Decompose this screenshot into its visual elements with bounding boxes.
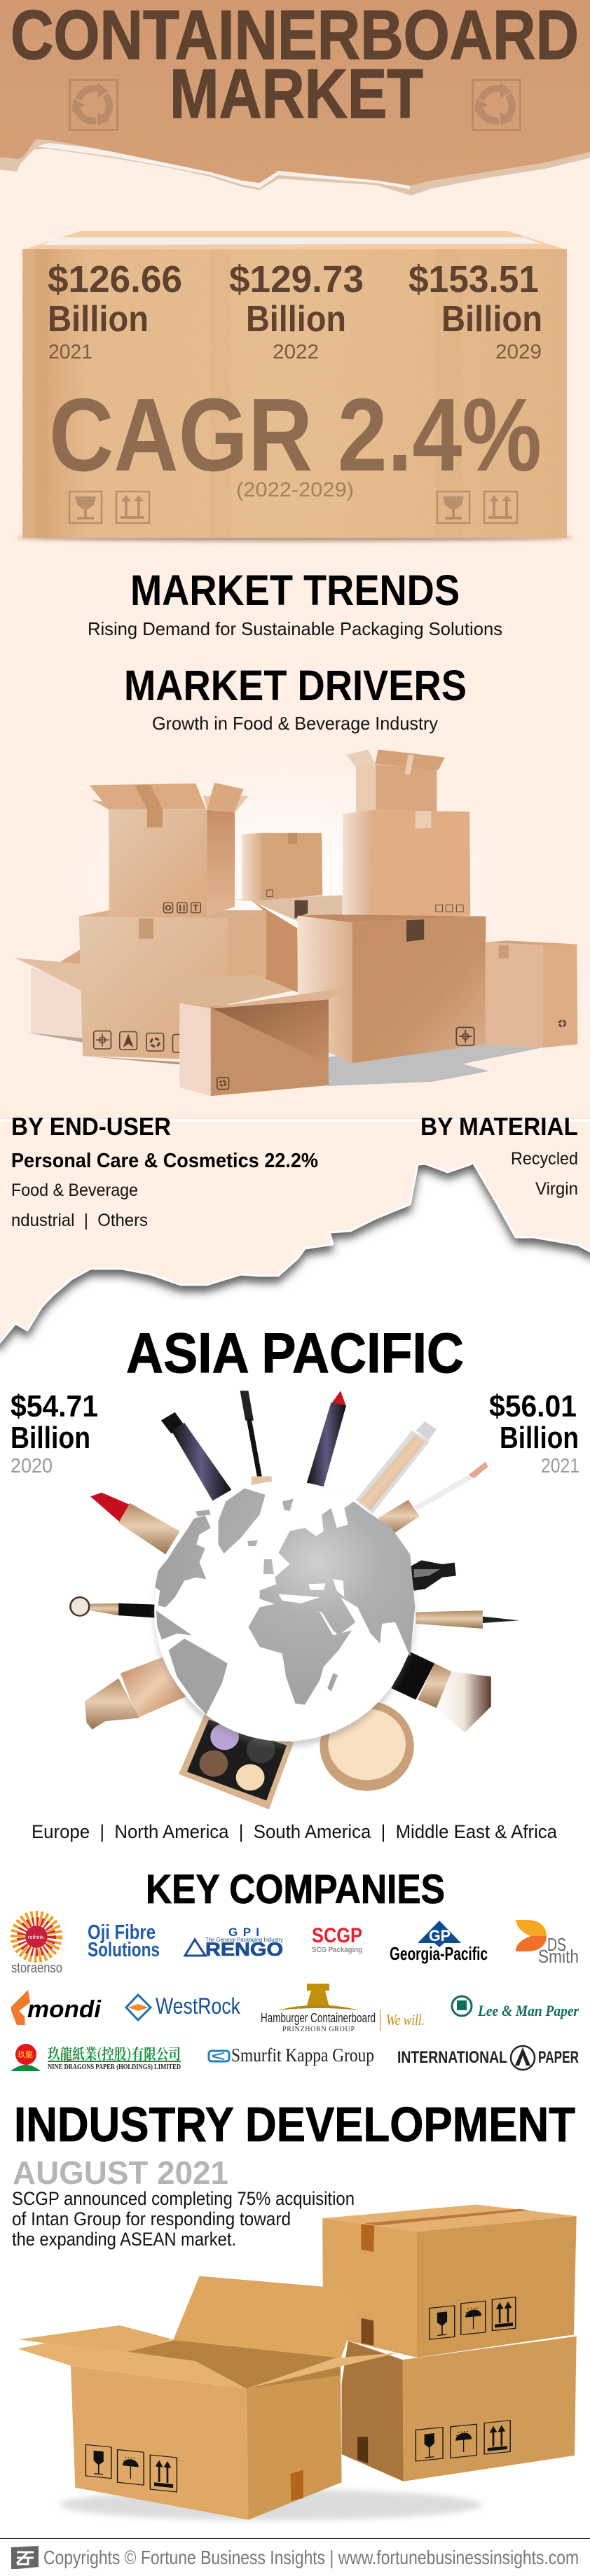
icon: eyeshadow palette [179, 1713, 294, 1809]
box: front open [155, 975, 350, 1096]
box: far left open [14, 949, 83, 1038]
panel: by material [420, 1113, 578, 1199]
logo: Stora Enso: rethink. [28, 1934, 45, 1940]
stat: 2022: 2022 [273, 341, 319, 363]
icon: eyeliner bottle [409, 1560, 456, 1591]
stat: 2029: 2029 [495, 341, 542, 363]
logo: Hamburger Containerboard: We will. [386, 2011, 425, 2028]
logo: GPI Rengo: RENGO [205, 1939, 283, 1960]
Africa [248, 1603, 352, 1705]
logo: Oji Fibre Solutions: Solutions [88, 1939, 160, 1961]
stat: 2021: Billion [48, 299, 149, 340]
icon: foundation bottle [85, 1657, 186, 1729]
logo: Hamburger Containerboard: Hamburger Containerboard [261, 2011, 376, 2025]
box: stacked upper [322, 2205, 577, 2358]
logo: DS Smith: DS [547, 1934, 566, 1955]
illustration: kraft cardboard boxes [18, 2205, 577, 2521]
panel: by end-user [11, 1113, 318, 1230]
logo: Mondi [11, 1990, 102, 2025]
heading: market drivers: MARKET DRIVERS [124, 662, 467, 709]
logo: Nine Dragons Paper: NINE DRAGONS PAPER (HOLDINGS) LIMITED [48, 2063, 181, 2071]
logo: SCGP [312, 1924, 362, 1954]
logo: DS Smith [516, 1920, 579, 1967]
icon: lipstick [90, 1493, 180, 1554]
icon: recycling mark left [66, 80, 120, 130]
footer [0, 2538, 590, 2569]
text: market driver: Growth in Food & Beverage Industry [152, 713, 438, 734]
CAGR period: (2022-2029) [236, 479, 354, 501]
text: development description: of Intan Group for responding toward [12, 2208, 291, 2229]
text: development description: the expanding ASEAN market. [12, 2229, 236, 2250]
logo: WestRock [126, 1993, 241, 2020]
logo: Georgia-Pacific: Georgia-Pacific [390, 1943, 488, 1964]
panel: market size cardboard box [16, 231, 574, 541]
title: MARKET [170, 55, 423, 132]
Greenland [218, 1488, 266, 1554]
icon: lip gloss wand [378, 1462, 488, 1535]
segment: industrial and others: ndustrial | Others [11, 1211, 148, 1230]
heading: by material: BY MATERIAL [420, 1113, 578, 1141]
stat: 2021: 2021 [48, 341, 92, 363]
Eurasia [260, 1501, 415, 1657]
logo: Hamburger Containerboard: PRINZHORN GROUP [282, 2026, 355, 2033]
icon: mascara tube [161, 1412, 231, 1501]
logo: DS Smith: Smith [538, 1946, 579, 1967]
stat: 2020: 2020 [11, 1455, 53, 1477]
stat: 2020: $54.71 [11, 1389, 98, 1423]
logo: GPI Rengo: G P I [228, 1926, 259, 1939]
stat: 2022 [229, 258, 364, 363]
logo: Nine Dragons Paper: 玖龍紙業(控股)有限公司 [48, 2043, 181, 2064]
heading: asia pacific: ASIA PACIFIC [126, 1322, 464, 1385]
box: upper left open [90, 783, 248, 917]
logo: Fortune Business Insights mark [11, 2546, 39, 2569]
stat: 2021 [48, 258, 182, 363]
box: small right [486, 940, 577, 1047]
heading: key companies: KEY COMPANIES [146, 1867, 445, 1912]
logo: Lee & Man Paper [452, 1996, 579, 2019]
stat: 2020 [11, 1389, 98, 1477]
stat: 2022: Billion [246, 299, 346, 340]
stat: 2022: $129.73 [229, 258, 364, 300]
stat: 2021: $126.66 [48, 258, 182, 300]
illustration: stacked cardboard boxes [14, 746, 577, 1096]
heading: market trends: MARKET TRENDS [130, 566, 460, 614]
text: market trend: Rising Demand for Sustainable Packaging Solutions [88, 618, 502, 639]
globe [154, 1481, 416, 1741]
stat: 2029: Billion [441, 299, 542, 340]
logo: Nine Dragons Paper: 玖龍 [18, 2049, 33, 2059]
illustration: globe surrounded by cosmetics [70, 1391, 519, 1809]
icon: lip gloss tube [355, 1421, 437, 1514]
North America [155, 1515, 211, 1607]
logo: Hamburger Containerboard [261, 1984, 425, 2033]
logo: Stora Enso: storaenso [11, 1961, 62, 1976]
icon: small brush [70, 1597, 156, 1617]
text: development description [12, 2188, 355, 2250]
logo: Oji Fibre Solutions: Oji Fibre [88, 1921, 156, 1944]
stat: 2021: 2021 [541, 1455, 579, 1477]
Great Britain [263, 1559, 274, 1574]
stat: 2029: $153.51 [409, 258, 539, 300]
stat: 2021 [489, 1389, 579, 1477]
title [11, 0, 579, 132]
logo: Mondi: mondi [27, 1996, 102, 2023]
logo: Nine Dragons Paper [11, 2043, 181, 2071]
top cardboard banner [0, 0, 590, 195]
logo: GPI Rengo: The General Packaging Industry [205, 1937, 283, 1943]
leading segment: Personal Care & Cosmetics 22.2% [11, 1150, 318, 1172]
logo: SCGP: SCGP [312, 1924, 362, 1947]
box: small centre [242, 833, 322, 900]
box: upper right open [346, 749, 445, 813]
icon: recycling mark right [469, 80, 523, 130]
icon: liquid liner [416, 1610, 519, 1629]
logo: Georgia-Pacific: GP [429, 1927, 451, 1944]
logo: Oji Fibre Solutions [88, 1921, 160, 1961]
icon: large brush [391, 1652, 491, 1733]
segment: virgin: Virgin [535, 1179, 578, 1199]
logo: WestRock: WestRock [156, 1993, 241, 2019]
box: large right [298, 914, 486, 1063]
segment: recycled: Recycled [511, 1149, 578, 1169]
box: right middle [343, 810, 470, 918]
text: other regions: Europe | North America | South America | Middle East & Africa [32, 1821, 558, 1842]
box: back centre [234, 896, 343, 992]
box: open [18, 2276, 399, 2520]
logo: Lee & Man Paper: Lee & Man Paper [477, 2002, 579, 2019]
panel: company logos [11, 1918, 579, 2071]
stat: 2029 [409, 258, 542, 363]
box: stacked lower [342, 2337, 577, 2481]
icons: fragile and this way up, right [437, 492, 517, 523]
stat: 2020: Billion [11, 1421, 90, 1455]
icon: powder compact [320, 1701, 414, 1791]
date: august 2021: AUGUST 2021 [13, 2154, 228, 2191]
box: large lower left [79, 910, 266, 1060]
icon: mascara wand [240, 1391, 272, 1487]
heading: by end-user: BY END-USER [11, 1113, 171, 1141]
logo: GPI Rengo [185, 1926, 283, 1960]
stat: 2021: $56.01 [489, 1389, 577, 1423]
icons: fragile and this way up, left [69, 492, 149, 523]
logo: International Paper [397, 2046, 579, 2070]
logo: Georgia-Pacific [390, 1921, 488, 1964]
logo: Stora Enso [11, 1918, 62, 1976]
logo: SCGP: SCG Packaging [312, 1946, 362, 1954]
text: development description: SCGP announced completing 75% acquisition [12, 2188, 355, 2209]
segment: food and beverage: Food & Beverage [11, 1181, 138, 1200]
peach section with torn lower edge [0, 0, 590, 1343]
icon: lip pencil [307, 1391, 346, 1487]
South America [169, 1638, 228, 1715]
logo: Smurfit Kappa: Smurfit Kappa Group [231, 2045, 374, 2066]
logo: International Paper: INTERNATIONAL [397, 2048, 507, 2067]
